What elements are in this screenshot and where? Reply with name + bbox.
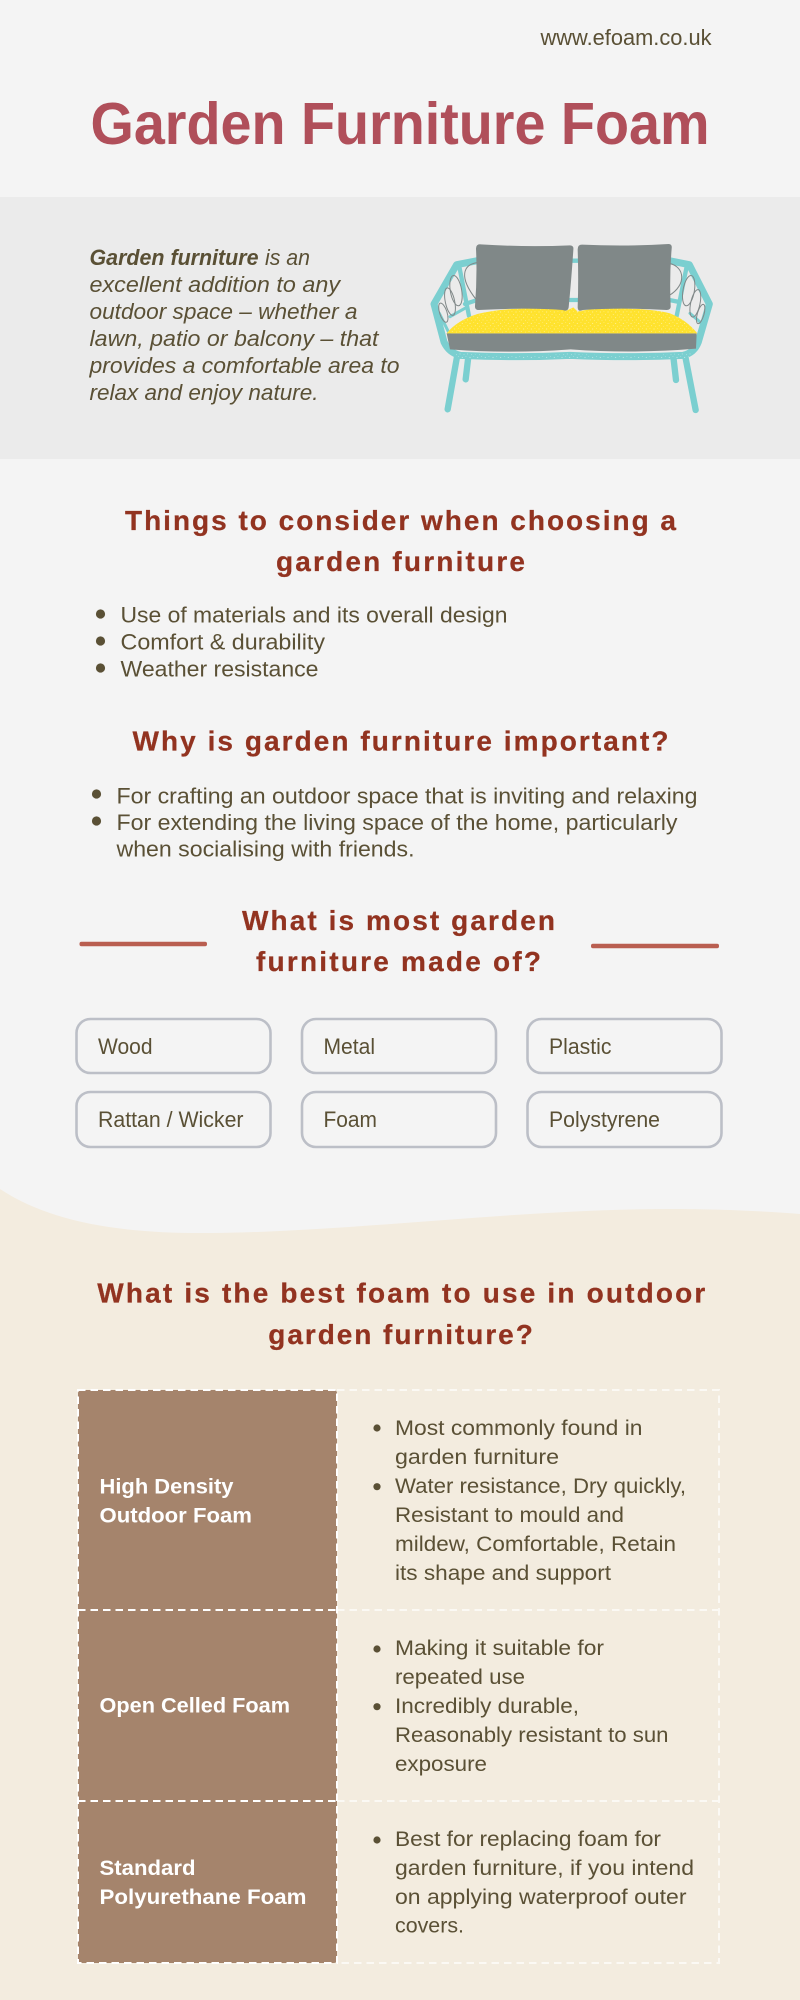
list: why important: when socialising with friends.	[115, 837, 414, 862]
material tags	[76, 1019, 722, 1147]
row: high density: mildew, Comfortable, Retain	[395, 1532, 676, 1556]
tag: foam: Foam	[324, 1107, 377, 1132]
list: things to consider: Weather resistance	[120, 657, 318, 682]
row: high density	[100, 1416, 686, 1585]
tag: wood: Wood	[98, 1034, 152, 1059]
row: standard polyurethane: Standard	[100, 1857, 196, 1880]
tag: rattan: Rattan / Wicker	[98, 1107, 244, 1132]
row: open celled: Making it suitable for	[395, 1636, 604, 1660]
row: open celled: Incredibly durable,	[395, 1694, 579, 1718]
row: high density: Water resistance, Dry quickly,	[395, 1474, 686, 1498]
intro paragraph: outdoor space – whether a	[90, 299, 358, 324]
tag: plastic	[528, 1019, 722, 1073]
left rule	[80, 942, 207, 946]
row: standard polyurethane: garden furniture, if you intend	[395, 1856, 694, 1880]
tag: polystyrene	[528, 1092, 722, 1147]
heading: best foam	[97, 1278, 705, 1350]
intro paragraph: excellent addition to any	[90, 272, 342, 297]
row: standard polyurethane: covers.	[395, 1914, 464, 1938]
row: open celled: repeated use	[395, 1665, 525, 1689]
intro paragraph: relax and enjoy nature.	[90, 380, 318, 405]
row: standard polyurethane	[100, 1827, 694, 1938]
row: open celled: Open Celled Foam	[100, 1695, 290, 1718]
heading: made of: What is most garden	[242, 905, 555, 936]
tag: metal: Metal	[324, 1034, 375, 1059]
tag: rattan	[76, 1092, 270, 1147]
row: open celled	[100, 1636, 668, 1776]
right rule	[591, 944, 719, 948]
heading: made of: furniture made of?	[256, 946, 541, 977]
row: high density: Most commonly found in	[395, 1416, 642, 1440]
heading: made of	[242, 905, 555, 977]
tag: metal	[302, 1019, 496, 1073]
list: why important	[92, 783, 697, 862]
intro paragraph: provides a comfortable area to	[88, 353, 399, 378]
tag: wood	[76, 1019, 270, 1073]
row: high density: Outdoor Foam	[100, 1504, 252, 1527]
title: Garden Furniture Foam	[90, 91, 710, 157]
row: high density: its shape and support	[395, 1561, 611, 1585]
tag: foam	[302, 1092, 496, 1147]
list: things to consider: Comfort & durability	[120, 630, 325, 655]
row: standard polyurethane: on applying waterproof outer	[395, 1885, 686, 1909]
row: high density: Resistant to mould and	[395, 1503, 624, 1527]
row: high density: garden furniture	[395, 1445, 559, 1469]
foam table	[78, 1390, 719, 1963]
icon: garden sofa	[434, 244, 709, 410]
list: why important: For extending the living space of the home, particularly	[116, 810, 678, 835]
website url: www.efoam.co.uk	[540, 25, 712, 50]
list: things to consider: Use of materials and its overall design	[120, 603, 508, 628]
heading: best foam: garden furniture?	[268, 1319, 533, 1350]
heading: best foam: What is the best foam to use in outdoor	[97, 1278, 705, 1309]
intro paragraph: lawn, patio or balcony – that	[90, 326, 379, 351]
heading: things to consider: garden furniture	[276, 546, 525, 577]
tag: plastic: Plastic	[549, 1034, 612, 1059]
intro paragraph: is an	[265, 245, 310, 270]
intro paragraph	[88, 245, 399, 405]
intro paragraph: Garden furniture	[90, 245, 258, 270]
row: open celled: exposure	[395, 1752, 487, 1776]
heading: things to consider	[125, 505, 676, 577]
heading: why important: Why is garden furniture important?	[132, 726, 668, 757]
list: things to consider	[96, 603, 508, 682]
heading: things to consider: Things to consider when choosing a	[125, 505, 676, 536]
tag: polystyrene: Polystyrene	[549, 1107, 660, 1132]
list: why important: For crafting an outdoor space that is inviting and relaxing	[116, 783, 698, 808]
panel: intro band	[0, 197, 800, 459]
row: high density: High Density	[100, 1475, 234, 1498]
row: standard polyurethane: Best for replacing foam for	[395, 1827, 661, 1851]
wave background panel	[0, 1189, 800, 2000]
row: open celled: Reasonably resistant to sun	[395, 1723, 668, 1747]
row: standard polyurethane: Polyurethane Foam	[100, 1886, 306, 1909]
